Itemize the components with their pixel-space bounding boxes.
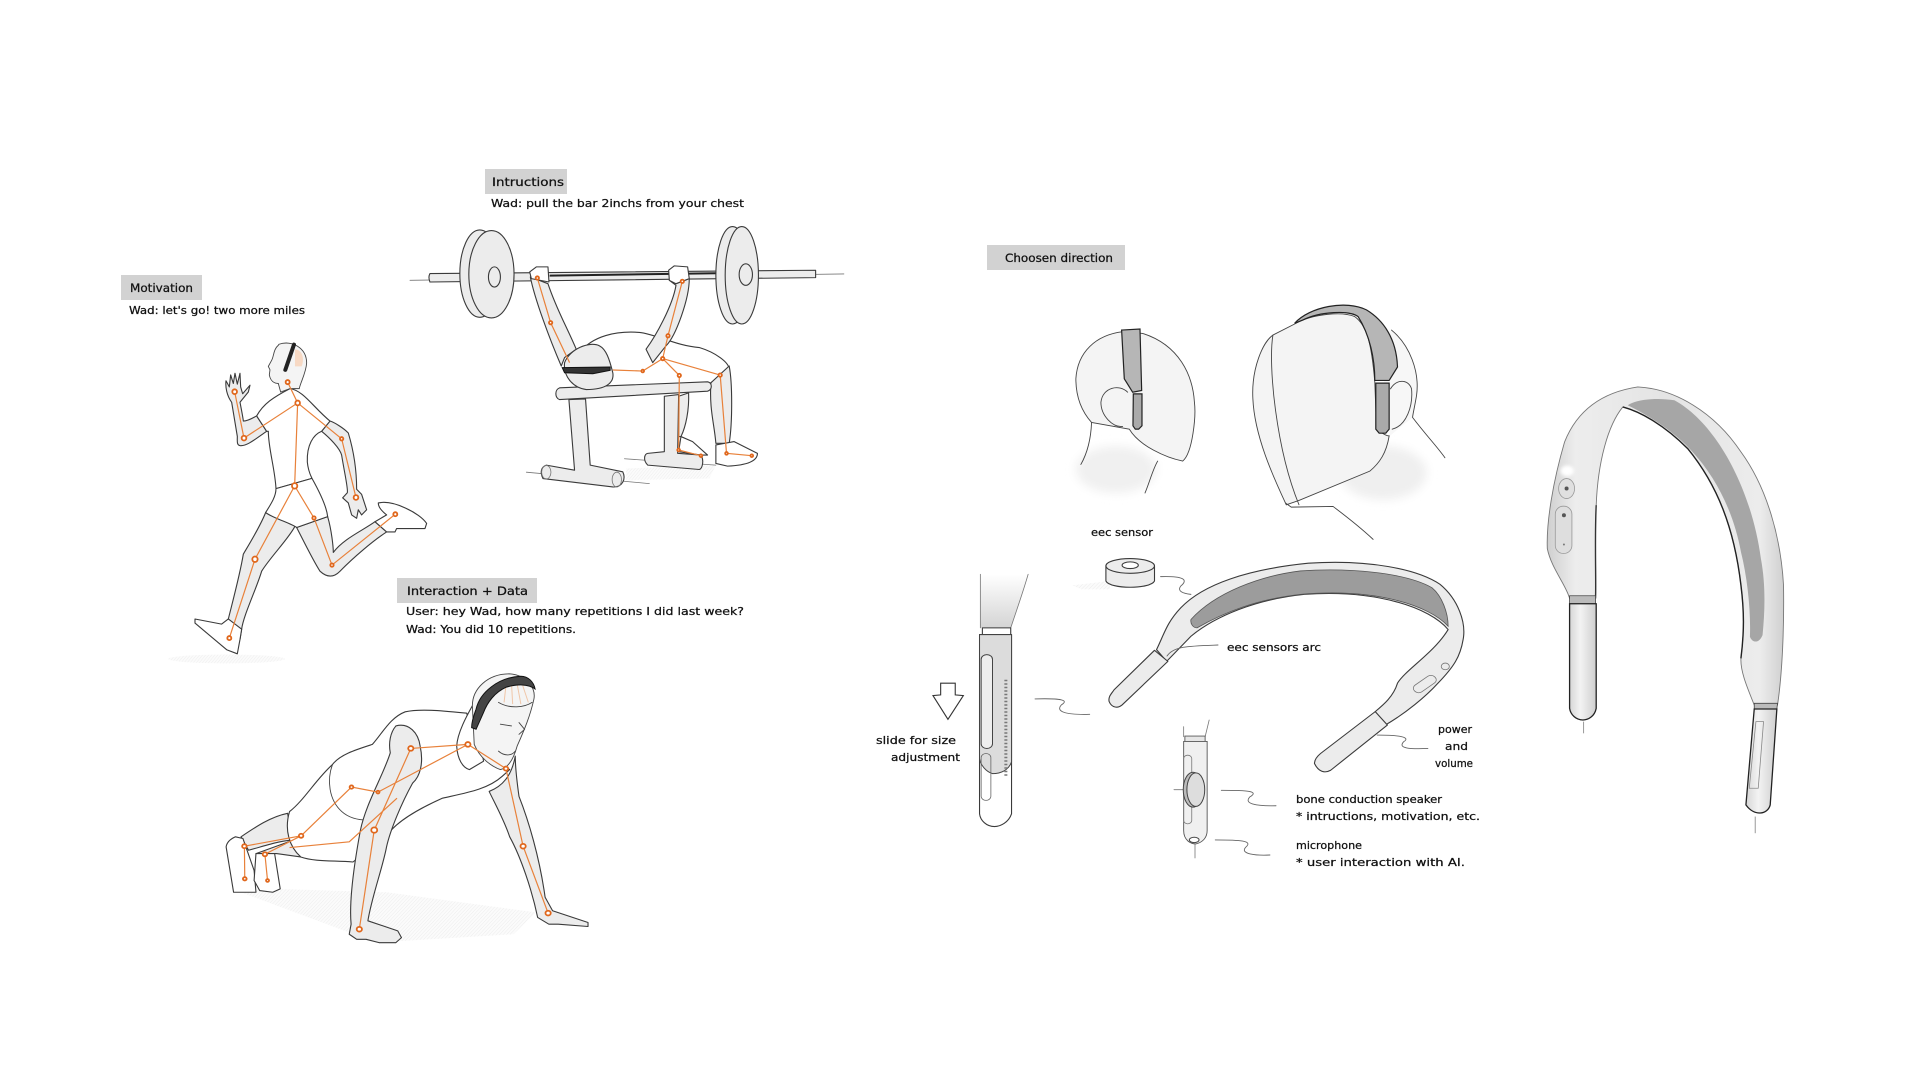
illustration: neckband with eec sensors arc	[1109, 562, 1464, 772]
label: eec sensors arc: eec sensors arc	[1227, 642, 1321, 654]
heading: Motivation: Motivation	[130, 281, 193, 295]
label: slide for size adjustment	[876, 699, 1090, 764]
illustration: speaker and microphone tube	[1174, 720, 1276, 858]
illustration: runner	[168, 343, 427, 663]
label: slide for size adjustment: slide for size	[876, 735, 956, 747]
heading: Intructions: Intructions	[492, 175, 564, 189]
text: dialogue	[406, 606, 744, 636]
heading: Intructions	[485, 169, 567, 194]
label: microphone: * user interaction with AI.	[1296, 857, 1465, 869]
label: power and volume: volume	[1435, 758, 1473, 770]
label: microphone	[1296, 840, 1465, 869]
label: power and volume: and	[1445, 741, 1468, 753]
heading: Choosen direction: Choosen direction	[1005, 251, 1113, 265]
icon: eec sensor puck	[1072, 559, 1191, 594]
illustration: sliding tube	[980, 574, 1028, 827]
label: power and volume: power	[1438, 724, 1473, 736]
label: power and volume	[1377, 724, 1473, 770]
panel: motivation	[121, 275, 427, 663]
illustration: push-up	[226, 674, 588, 943]
text: dialogue: User: hey Wad, how many repetitions I did last week?	[406, 606, 744, 618]
label: slide for size adjustment: adjustment	[891, 752, 960, 764]
heading: Interaction + Data: Interaction + Data	[407, 584, 528, 598]
illustration: three-quarter head with band	[1253, 305, 1445, 539]
panel: instructions	[410, 169, 844, 487]
heading: Choosen direction	[987, 245, 1125, 270]
label: eec sensor: eec sensor	[1091, 527, 1154, 539]
label: bone conduction speaker	[1296, 794, 1480, 823]
text: bench speech: Wad: pull the bar 2inchs from your chest	[491, 198, 744, 210]
text: runner speech: Wad: let's go! two more miles	[129, 305, 305, 317]
label: microphone: microphone	[1296, 840, 1362, 852]
heading: Motivation	[121, 275, 202, 300]
illustration: rendered headband	[1547, 387, 1784, 833]
heading: Interaction + Data	[397, 578, 537, 603]
panel: interaction and data	[226, 578, 744, 943]
text: dialogue: Wad: You did 10 repetitions.	[406, 624, 576, 636]
label: bone conduction speaker: * intructions, motivation, etc.	[1296, 811, 1480, 823]
icon: down arrow	[933, 683, 963, 719]
label: eec sensors arc	[1167, 642, 1321, 656]
illustration: side head with band	[1076, 329, 1195, 493]
panel: chosen direction	[876, 245, 1784, 869]
label: bone conduction speaker: bone conduction speaker	[1296, 794, 1443, 806]
illustration: bench press	[410, 227, 844, 487]
